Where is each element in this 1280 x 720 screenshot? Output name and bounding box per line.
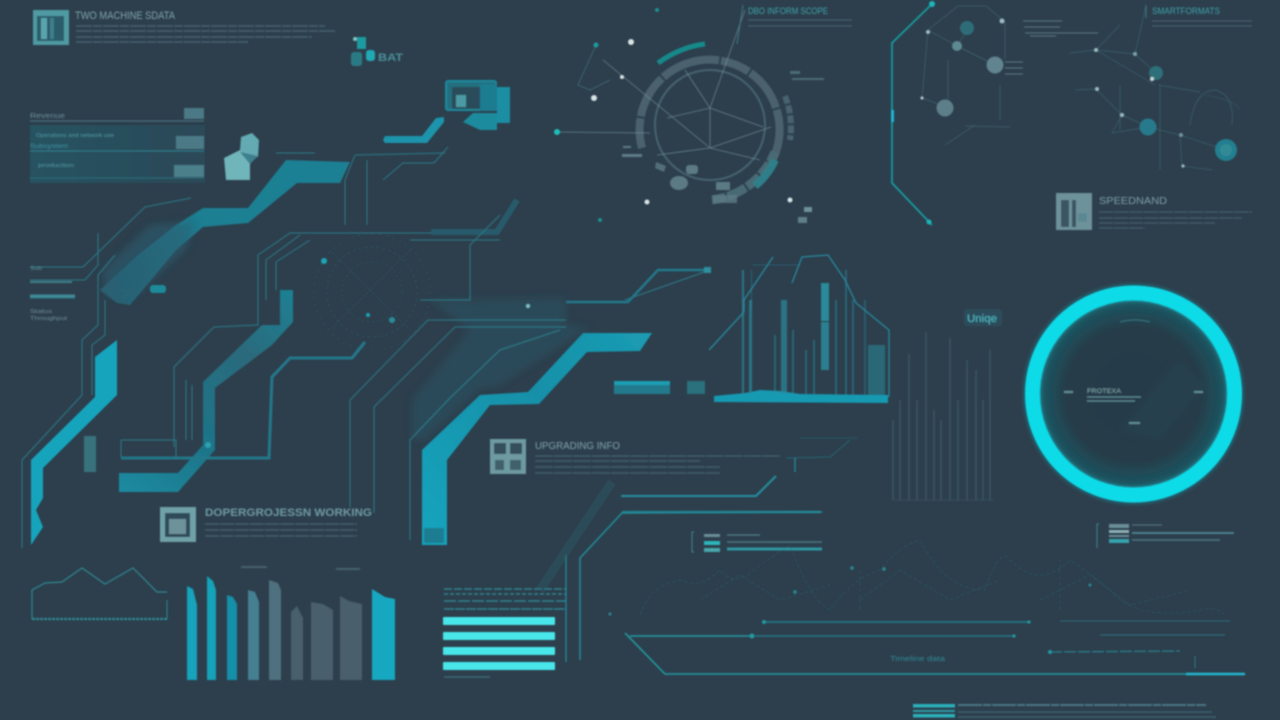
chart vertical bars [742, 270, 885, 395]
text block: lower left [160, 507, 372, 542]
legend: bottom centre [692, 532, 822, 552]
panel: table: Operations and network use [36, 133, 114, 139]
text block lines [76, 26, 336, 42]
text block: top centre-right [737, 5, 852, 44]
faint topographic chart [640, 540, 1225, 615]
line chart [32, 568, 168, 619]
network labels [1005, 21, 1098, 74]
text block: top centre-right: DBO INFORM SCOPE [748, 6, 828, 16]
chart contour [709, 255, 889, 397]
hex bracket line [892, 3, 933, 225]
small logo cluster: BAT [378, 52, 403, 64]
circuit trace: thick centre [121, 200, 711, 458]
text lines [205, 524, 357, 536]
line field chart [893, 332, 994, 500]
header block: top left [33, 10, 336, 45]
ring labels [1064, 388, 1203, 424]
circuit band: centre [119, 290, 293, 492]
small logo cluster [351, 37, 403, 66]
text lines [535, 456, 780, 473]
circuit traces [22, 147, 710, 548]
nodes: circuit highlights [84, 258, 530, 543]
side labels left: Status [30, 309, 52, 315]
heading: UPGRADING INFO [535, 440, 620, 452]
gauge ring [1032, 293, 1234, 495]
panel: table: Subsystem [30, 144, 68, 150]
panel: table: production [38, 163, 74, 169]
nodes on bracket [891, 1, 935, 224]
connector traces: bottom centre [540, 438, 858, 662]
heading: DOPERGROJESSN WORKING [205, 507, 372, 519]
network graph: right [1070, 5, 1240, 170]
icon: picture frame [160, 507, 196, 542]
skyline chart [709, 255, 889, 403]
bottom segments [712, 152, 775, 200]
side labels left: Sub [30, 266, 42, 272]
legend: bottom right [1097, 524, 1234, 548]
side labels left [30, 266, 75, 322]
timeline frame [625, 621, 1245, 674]
outer ring [640, 60, 780, 165]
radar fill blocks [655, 162, 737, 203]
panel: table [30, 108, 205, 183]
topographic nodes [608, 566, 1092, 616]
cluster: isometric blocks [224, 133, 259, 180]
ring labels: FROTEXA [1087, 388, 1122, 395]
spokes [558, 10, 771, 160]
triangle outline [578, 45, 610, 90]
circuit band: main upper [100, 160, 350, 305]
text block: centre [490, 439, 780, 474]
text block: top right: SMARTFORMATS [1152, 6, 1220, 16]
heading: SPEEDNAND [1099, 195, 1167, 207]
radar nodes [554, 8, 812, 223]
teal arc [658, 44, 705, 63]
side labels left: Throughput [30, 316, 68, 322]
panel: table: Revenue [30, 113, 65, 120]
footer text block [913, 704, 1216, 718]
circuit band: lower right [422, 333, 652, 545]
connector band: upper [383, 117, 444, 143]
label bar: beside skyline [614, 381, 705, 394]
text lines [1099, 212, 1252, 228]
badge label [964, 309, 1002, 326]
circuit band haze [103, 222, 196, 300]
icon: document [33, 10, 69, 45]
network blob: circular fine mesh [314, 234, 430, 350]
text block: right [1056, 193, 1252, 230]
timeline nodes [750, 620, 1052, 654]
list: cyan bars with text [443, 589, 566, 677]
icon: grid [490, 439, 526, 474]
badge label: Uniqe [967, 313, 997, 325]
inner ring [655, 70, 765, 180]
timeline label: Timeline data [890, 656, 945, 663]
node: trace endpoint [704, 267, 711, 273]
right arc [785, 96, 791, 140]
translucent overlay: right connector [412, 298, 590, 440]
radar labels [622, 71, 824, 157]
text block: top right [1146, 5, 1252, 26]
chart baseline [714, 390, 888, 403]
circuit band: left bright [31, 340, 117, 545]
network graph: left [920, 6, 1098, 145]
circular radar chart [558, 10, 791, 200]
heading: TWO MACHINE SDATA [75, 10, 176, 22]
icon: panel [1056, 193, 1092, 230]
icon: stacked screens top centre-left [446, 81, 510, 130]
bar chart labels [241, 566, 360, 570]
bar chart [187, 566, 395, 680]
